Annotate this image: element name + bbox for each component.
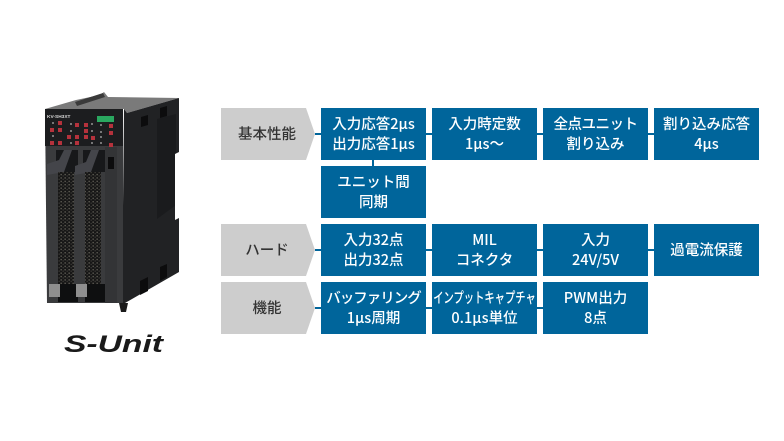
status LEDs [50, 121, 113, 147]
product photo: S-Unit module [45, 92, 179, 312]
device top face [45, 92, 179, 113]
connector: row 3 [315, 307, 543, 309]
box: インプットキャプチャ: 0.1μs単位 [451, 307, 518, 328]
box: 割り込み応答: 割り込み応答 [663, 113, 750, 134]
connector: row 1 [315, 133, 654, 135]
model label: KV-SH3XT [47, 114, 71, 120]
device front panel [45, 109, 123, 303]
box: 入力24V/5V [543, 224, 648, 276]
box: 全点ユニット割り込み [543, 108, 648, 160]
box: バッファリング: 1μs周期 [347, 307, 400, 328]
box: 入力32点出力32点: 入力32点 [343, 229, 404, 250]
box: 入力時定数: 入力時定数 [448, 113, 521, 134]
right connector [75, 150, 105, 302]
box: 入力時定数 [432, 108, 537, 160]
connector: row 2 [315, 249, 654, 251]
box: インプットキャプチャ: インプットキャプチャ [433, 287, 536, 308]
S-Unit logo: S-Unit [64, 331, 164, 358]
selector switch [108, 157, 114, 169]
row label: 基本性能 [221, 108, 315, 160]
box: 入力応答: 出力応答1μs [332, 133, 415, 154]
box: 割り込み応答: 4μs [694, 133, 719, 154]
box: MILコネクタ: MIL [472, 229, 497, 250]
box: 入力32点出力32点: 出力32点 [343, 249, 404, 270]
box: 割り込み応答 [654, 108, 759, 160]
box: ユニット間同期: ユニット間 [337, 171, 410, 192]
row label: ハード: ハード [245, 239, 289, 260]
box: 入力応答: 入力応答2μs [332, 113, 415, 134]
box: PWM出力 [543, 282, 648, 334]
left connector [47, 150, 78, 302]
box: 入力応答 [321, 108, 426, 160]
box: 全点ユニット割り込み: 割り込み [566, 133, 624, 154]
box: PWM出力: 8点 [584, 307, 607, 328]
box: 過電流保護: 過電流保護 [670, 239, 743, 260]
box: PWM出力: PWM出力 [564, 287, 627, 308]
row label: ハード [221, 224, 315, 276]
box: インプットキャプチャ [432, 282, 537, 334]
box: ユニット間同期 [321, 166, 426, 218]
box: 過電流保護 [654, 224, 759, 276]
row label: 基本性能: 基本性能 [238, 123, 296, 144]
row label: 機能 [221, 282, 315, 334]
box: 入力24V/5V: 24V/5V [572, 249, 619, 270]
row label: 機能: 機能 [252, 297, 282, 318]
box: バッファリング: バッファリング [326, 287, 421, 308]
device side face [122, 98, 179, 303]
box: 入力24V/5V: 入力 [581, 229, 610, 250]
box: MILコネクタ: コネクタ [456, 249, 513, 270]
box: 入力32点出力32点 [321, 224, 426, 276]
box: 全点ユニット割り込み: 全点ユニット [554, 113, 638, 134]
connector: row 1 down [372, 160, 374, 166]
box: バッファリング [321, 282, 426, 334]
box: ユニット間同期: 同期 [359, 191, 388, 212]
box: 入力時定数: 1μs〜 [465, 133, 504, 154]
box: MILコネクタ [432, 224, 537, 276]
